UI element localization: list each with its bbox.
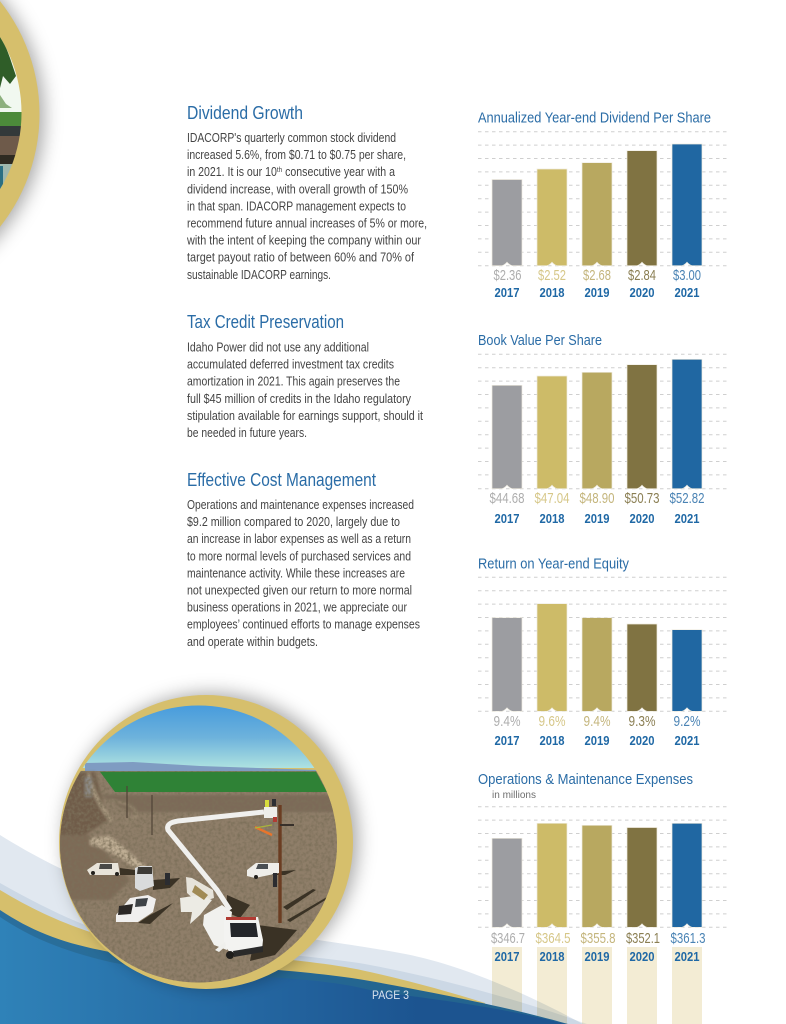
bucket truck — [180, 877, 263, 959]
power pole with crossarm — [278, 805, 282, 923]
boom arm — [168, 812, 264, 910]
value labels: 9.2% — [674, 713, 700, 730]
chart: Return on Year-end Equity — [478, 557, 730, 748]
value labels: $3.00 — [673, 267, 701, 284]
value labels — [494, 713, 700, 730]
body text: full $45 million of credits in the Idaho regulatory — [187, 392, 412, 406]
chart: Annualized Year-end Dividend Per Share — [478, 111, 730, 300]
value labels: $50.73 — [624, 490, 660, 507]
body text: target payout ratio of between 60% and 70% of — [187, 251, 414, 265]
body text: an increase in labor expenses as well as a return — [187, 532, 411, 546]
value labels: $355.8 — [580, 930, 616, 947]
chart title: Annualized Year-end Dividend Per Share — [478, 111, 711, 127]
section: Tax Credit Preservation — [187, 311, 423, 440]
year labels: 2020 — [630, 734, 655, 748]
value labels — [491, 930, 706, 947]
circular photo: bucket truck crew at power pole — [55, 693, 358, 989]
distant poles — [127, 786, 152, 835]
year labels: 2020 — [630, 950, 655, 964]
year column tints behind the last chart — [492, 947, 702, 1024]
year labels — [494, 286, 700, 300]
year labels: 2021 — [674, 734, 700, 748]
value labels: 9.4% — [584, 713, 610, 730]
body text — [187, 498, 420, 649]
page number: PAGE 3 — [372, 988, 409, 1002]
crew members — [165, 873, 277, 887]
service trucks — [87, 863, 279, 922]
body text: in 2021. It is our 10 — [187, 165, 293, 179]
body text: in that span. IDACORP management expects to — [187, 199, 406, 213]
value labels: $2.52 — [538, 267, 566, 284]
top-left circular photo — [0, 0, 44, 297]
chart title: Return on Year-end Equity — [478, 557, 630, 573]
body text: with the intent of keeping the company within our — [186, 234, 421, 248]
value labels: 9.3% — [628, 713, 656, 730]
year labels: 2020 — [630, 286, 655, 300]
green field — [100, 772, 327, 792]
body text: $9.2 million compared to 2020, largely due to — [187, 515, 400, 529]
year labels: 2018 — [540, 950, 565, 964]
heading: Effective Cost Management — [187, 469, 376, 490]
value labels: $346.7 — [491, 930, 525, 947]
body text: Operations and maintenance expenses increased — [187, 498, 414, 512]
unit note: in millions — [492, 789, 536, 801]
value labels: 9.6% — [538, 713, 566, 730]
chart title: Operations & Maintenance Expenses — [478, 772, 693, 788]
value labels: $364.5 — [536, 930, 570, 947]
value labels — [490, 490, 704, 507]
year labels: 2021 — [674, 950, 700, 964]
body text: to more normal levels of purchased services and — [187, 549, 411, 563]
bars — [492, 144, 702, 266]
shadows — [120, 868, 327, 961]
year labels: 2020 — [630, 512, 655, 526]
heading: Tax Credit Preservation — [187, 311, 344, 332]
footer swoosh — [0, 835, 587, 1024]
value labels: $52.82 — [670, 490, 704, 507]
year labels: 2018 — [540, 512, 565, 526]
chart: Operations & Maintenance Expenses — [478, 772, 730, 964]
bars — [492, 604, 702, 711]
body text: th — [277, 165, 282, 174]
year labels — [494, 512, 700, 526]
year labels: 2017 — [494, 734, 520, 748]
body text — [186, 131, 427, 282]
year labels: 2021 — [674, 286, 700, 300]
body text: dividend increase, with overall growth of 150% — [187, 182, 408, 196]
body text: amortization in 2021. This again preserves the — [187, 375, 400, 389]
bars — [492, 823, 702, 927]
year labels: 2017 — [494, 950, 520, 964]
value labels: $2.84 — [628, 267, 656, 284]
year labels: 2017 — [494, 512, 520, 526]
year labels: 2018 — [540, 286, 565, 300]
value labels: $361.3 — [670, 930, 706, 947]
chart: Book Value Per Share — [478, 333, 730, 526]
body text: and operate within budgets. — [187, 635, 318, 649]
year labels: 2018 — [540, 734, 565, 748]
value labels: 9.4% — [494, 713, 520, 730]
year labels: 2017 — [494, 286, 520, 300]
value labels: $2.68 — [583, 267, 611, 284]
value labels — [494, 267, 701, 284]
year labels — [494, 734, 700, 748]
year labels: 2021 — [674, 512, 700, 526]
body text: stipulation available for earnings support, should it — [187, 409, 423, 423]
value labels: $2.36 — [494, 267, 522, 284]
chart title: Book Value Per Share — [478, 333, 602, 349]
body text: consecutive year with a — [282, 165, 395, 179]
body text: recommend future annual increases of 5% or more, — [187, 216, 427, 230]
section: Effective Cost Management — [187, 469, 420, 649]
body text: IDACORP's quarterly common stock dividend — [187, 131, 396, 145]
body text: Idaho Power did not use any additional — [187, 340, 369, 354]
body text: business operations in 2021, we appreciate our — [187, 601, 407, 615]
body text: sustainable IDACORP earnings. — [187, 268, 331, 282]
bars — [492, 359, 702, 489]
year labels: 2019 — [584, 512, 610, 526]
body text: increased 5.6%, from $0.71 to $0.75 per share, — [187, 148, 406, 162]
body text: employees’ continued efforts to manage expenses — [187, 618, 420, 632]
heading: Dividend Growth — [187, 102, 303, 123]
body text: not unexpected given our return to more normal — [187, 584, 412, 598]
body text: maintenance activity. While these increases are — [187, 566, 405, 580]
year labels: 2019 — [584, 950, 610, 964]
body text — [187, 340, 423, 440]
year labels — [494, 950, 700, 964]
value labels: $47.04 — [534, 490, 570, 507]
year labels: 2019 — [584, 734, 610, 748]
value labels: $48.90 — [580, 490, 614, 507]
value labels: $44.68 — [490, 490, 524, 507]
year labels: 2019 — [584, 286, 610, 300]
body text: accumulated deferred investment tax credits — [187, 358, 394, 372]
body text: be needed in future years. — [187, 426, 307, 440]
value labels: $352.1 — [626, 930, 660, 947]
section: Dividend Growth — [186, 102, 427, 282]
